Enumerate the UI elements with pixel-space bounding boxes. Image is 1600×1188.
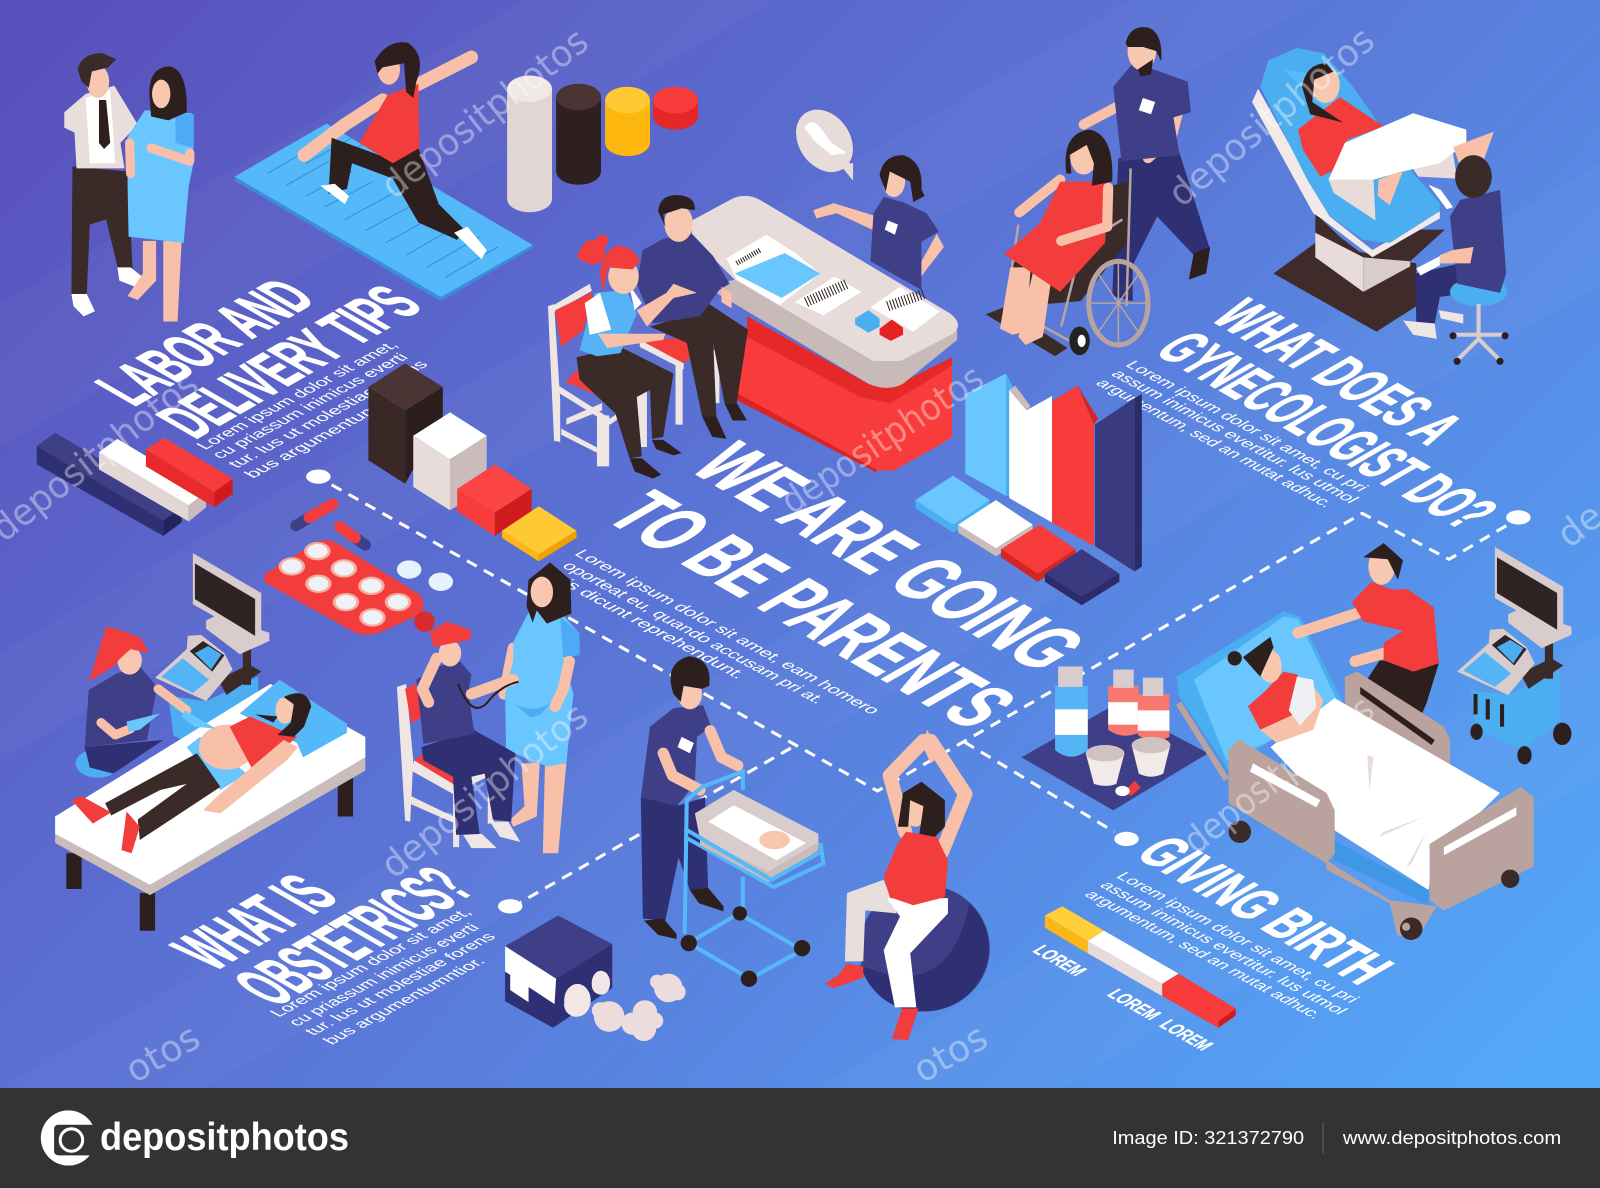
title body text: his dicunt reprehendunt. <box>547 572 751 681</box>
footer bar <box>0 1088 1600 1188</box>
labor body text: tur. lus ut molestiae forens <box>224 358 432 470</box>
labor body text: bus argumentumntior. <box>240 383 422 481</box>
giving birth body text: assum inimicus evertitur. lus utmol <box>1095 879 1352 1017</box>
logo text: depositphotos <box>100 1116 349 1159</box>
icon: ultrasound machine left <box>155 553 269 756</box>
heading: labor and delivery tips: LABOR AND <box>79 269 331 415</box>
icon: hospital bed with mother and baby <box>1177 543 1534 940</box>
watermarks: otos <box>905 1015 995 1092</box>
dashed connector lines <box>332 485 1508 902</box>
icon: sonographer <box>76 627 216 778</box>
icon: pregnant woman on exercise ball <box>824 730 990 1040</box>
bar labels <box>1027 943 1217 1054</box>
icon: pills <box>264 504 453 635</box>
labor body text: Lorem ipsum dolor sit amet, <box>192 338 403 452</box>
watermarks: depositphotos <box>1160 18 1383 215</box>
icon: yoga mat with exercising woman <box>235 42 533 301</box>
bar labels: LOREM <box>1154 1017 1217 1054</box>
icon: gynecologist chair <box>1252 48 1509 365</box>
heading: what is obstetrics: OBSTETRICS? <box>217 857 492 1016</box>
title: we are going to be parents: WE ARE GOING <box>671 431 1106 682</box>
icon: expectant couple <box>64 53 194 321</box>
chart: arrow columns <box>965 374 1142 572</box>
icon: reception desk <box>692 196 958 473</box>
watermarks: depositphotos <box>372 694 596 887</box>
labor body text: cu priassum inimicus everti <box>207 351 413 461</box>
icon: exam bed with patient <box>55 680 365 931</box>
giving birth body text: argumentum, sed an mutat adhuc. <box>1080 888 1328 1021</box>
icon: cotton balls <box>592 974 686 1041</box>
horizontal bars: labor <box>37 433 233 536</box>
obstetrics body text: tur. lus ut molestiae forens <box>300 930 500 1038</box>
gynecologist body text: Lorem ipsum dolor sit amet, cu pri <box>1121 358 1373 494</box>
watermarks: depositphotos <box>1175 687 1382 862</box>
obstetrics body text: Lorem ipsum dolor sit amet, <box>265 906 476 1019</box>
icon: counter waiting couple <box>548 195 748 479</box>
bar: giving birth segmented <box>1045 906 1236 1028</box>
cylinder bar chart <box>507 76 698 212</box>
image id: Image ID: 321372790 <box>1112 1127 1304 1148</box>
connector dots <box>306 469 1531 913</box>
heading: what does a gynecologist do <box>1141 290 1513 538</box>
gynecologist body text: assum inimicus evertitur. lus utmol <box>1107 367 1363 506</box>
giving birth body text: Lorem ipsum dolor sit amet, cu pri <box>1112 870 1364 1005</box>
icon: ultrasound machine right <box>1457 547 1571 764</box>
icon: stethoscope scene <box>397 562 580 853</box>
watermarks: otos <box>118 1015 207 1092</box>
icon: supplies box <box>505 915 612 1028</box>
watermarks: depositphotos <box>773 356 991 523</box>
bar labels: LOREM <box>1027 943 1091 979</box>
site url: www.depositphotos.com <box>1342 1127 1561 1148</box>
heading: labor and delivery tips <box>79 269 438 447</box>
title: we are going to be parents <box>587 431 1106 740</box>
labor body text <box>192 338 432 481</box>
bar labels: LOREM <box>1102 987 1165 1023</box>
icon: baby speech bubble <box>784 99 865 183</box>
logo mark <box>41 1110 97 1166</box>
title body text: Lorem ipsum dolor sit amet, eam homero <box>570 547 885 717</box>
isometric block chart <box>368 363 577 561</box>
obstetrics body text: bus argumentumntior. <box>318 955 490 1047</box>
title body text: oporteat eu, quando accusam pri at. <box>558 559 830 706</box>
heading: giving birth: GIVING BIRTH <box>1122 828 1408 992</box>
gynecologist body text: argumentum, sed an mutat adhuc. <box>1091 377 1339 510</box>
obstetrics body text <box>265 906 500 1047</box>
title: we are going to be parents: TO BE PARENTS <box>587 480 1036 740</box>
heading: what is obstetrics: WHAT IS <box>155 865 355 980</box>
heading: what is obstetrics <box>155 857 492 1016</box>
icon: nurse at desk <box>813 155 944 290</box>
watermarks: depositphotos <box>373 19 596 207</box>
icon: medicine on mat <box>1021 666 1208 810</box>
chart: floor tiles <box>915 476 1119 605</box>
heading: labor and delivery tips: DELIVERY TIPS <box>140 276 438 447</box>
icon: wheelchair with patient and nurse <box>986 27 1210 356</box>
obstetrics body text: cu priassum inimicus everti <box>284 921 484 1029</box>
icon: nurse with baby cradle <box>641 656 823 987</box>
